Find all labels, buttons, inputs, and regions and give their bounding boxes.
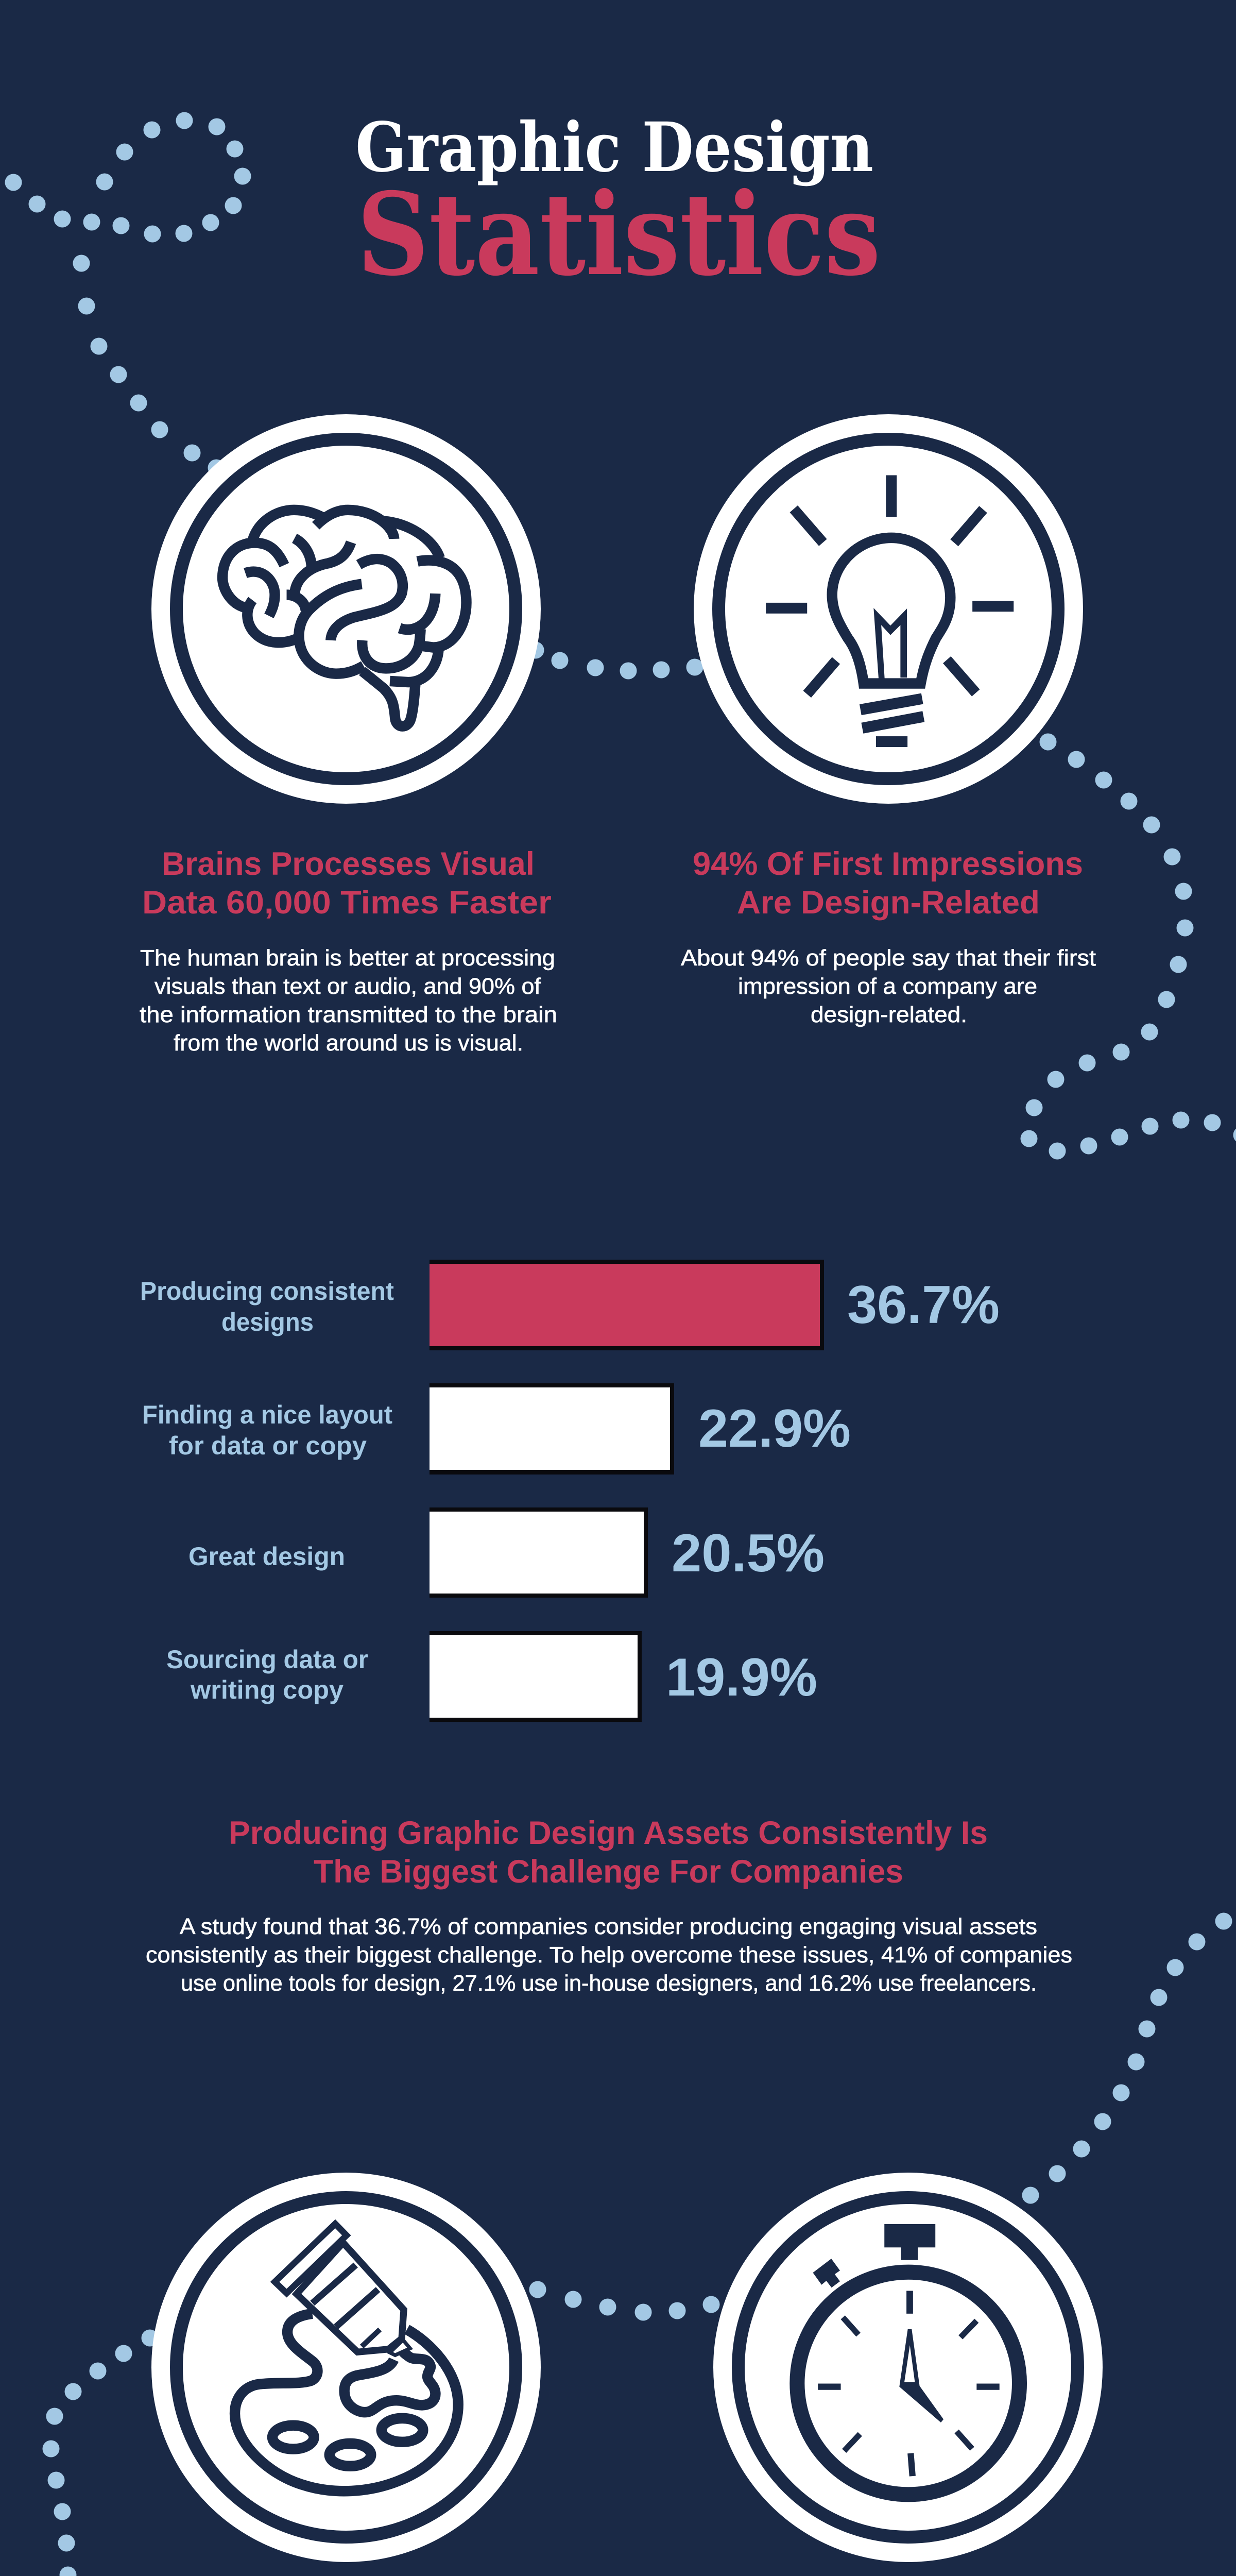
- dotted path: bottom left and bottom wave: [51, 2338, 1223, 2576]
- bar row: great design: 20.5%: [672, 1523, 825, 1583]
- heading: Brains Processes Visual: [162, 846, 535, 882]
- bar row: finding a nice layout: 22.9%: [698, 1399, 851, 1459]
- body text: A study found that 36.7% of companies consider producing engaging visual assets: [180, 1914, 1037, 1939]
- panel: color readership: [147, 2173, 548, 2576]
- bar row: producing consistent designs: designs: [221, 1308, 314, 1336]
- heading: Producing Graphic Design Assets Consistently Is: [229, 1815, 988, 1851]
- body text: [140, 945, 557, 1056]
- body text: visuals than text or audio, and 90% of: [154, 974, 541, 999]
- body text: [681, 945, 1096, 1027]
- heading: Are Design-Related: [737, 885, 1040, 921]
- heading: Data 60,000 Times Faster: [142, 885, 552, 921]
- bar row: producing consistent designs: [140, 1260, 1000, 1350]
- body text: design-related.: [811, 1002, 967, 1027]
- body text: [146, 1914, 1072, 1996]
- panel: first impressions stat: [681, 414, 1096, 1027]
- dotted path: right side descent to clock: [1031, 1921, 1224, 2195]
- heading: [142, 846, 552, 921]
- heading: [693, 846, 1083, 921]
- dotted path: right side loop: [1029, 742, 1236, 1151]
- panel: biggest challenge: [146, 1815, 1072, 1996]
- body text: consistently as their biggest challenge. To help overcome these issues, 41% of companies: [146, 1942, 1072, 1968]
- bar row: sourcing data or writing copy: Sourcing data or: [166, 1645, 368, 1674]
- title line 1: Graphic Design: [355, 108, 873, 188]
- body text: from the world around us is visual.: [174, 1030, 523, 1056]
- dotted path: brain to bulb connector: [536, 650, 695, 671]
- body text: the information transmitted to the brain: [140, 1002, 557, 1027]
- heading: [229, 1815, 988, 1890]
- bar row: producing consistent designs: Producing consistent: [140, 1277, 394, 1306]
- icon: brain: [151, 414, 541, 804]
- title: [355, 108, 881, 301]
- bar row: sourcing data or writing copy: [166, 1631, 817, 1722]
- dotted path: palette to clock connector: [538, 2290, 711, 2312]
- panel: color and design success: [708, 2173, 1108, 2576]
- heading: The Biggest Challenge For Companies: [314, 1854, 903, 1890]
- panel: brain stat: [140, 414, 557, 1056]
- icon: paint tube and palette: [151, 2173, 541, 2562]
- icon: stopwatch: [713, 2173, 1103, 2562]
- body text: impression of a company are: [738, 974, 1037, 999]
- bar row: sourcing data or writing copy: 19.9%: [666, 1648, 817, 1707]
- body text: The human brain is better at processing: [140, 945, 555, 971]
- bar row: sourcing data or writing copy: writing copy: [190, 1675, 344, 1704]
- bar row: great design: Great design: [188, 1542, 345, 1571]
- body text: About 94% of people say that their first: [681, 945, 1096, 971]
- bar chart: [140, 1260, 1000, 1722]
- bar row: finding a nice layout: for data or copy: [169, 1431, 367, 1460]
- dotted path: top left swirl: [13, 121, 243, 468]
- title line 2: Statistics: [357, 167, 881, 301]
- bar row: finding a nice layout: Finding a nice layout: [142, 1400, 392, 1429]
- heading: 94% Of First Impressions: [693, 846, 1083, 882]
- bar row: great design: [188, 1507, 825, 1598]
- bar row: producing consistent designs: 36.7%: [847, 1275, 1000, 1335]
- bar row: finding a nice layout: [142, 1383, 851, 1475]
- icon: light bulb: [694, 414, 1083, 804]
- body text: use online tools for design, 27.1% use in-house designers, and 16.2% use freelancers.: [181, 1971, 1037, 1996]
